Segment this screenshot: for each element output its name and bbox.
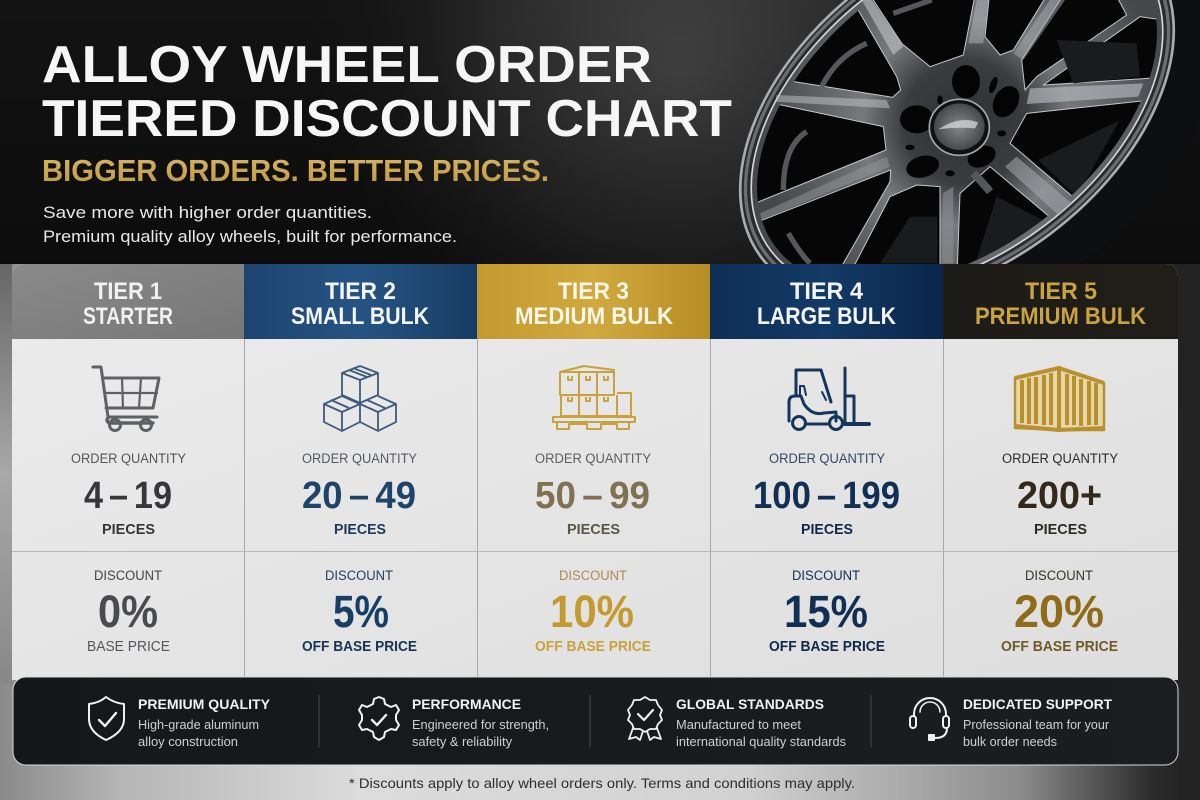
icon: headset	[910, 698, 949, 740]
icon: stacked boxes	[324, 366, 396, 431]
panel: tier 5: ORDER QUANTITY	[1002, 451, 1118, 466]
feature: premium quality	[89, 696, 271, 749]
title	[42, 36, 732, 148]
icon: shopping cart	[93, 367, 159, 430]
feature: performance: PERFORMANCE	[412, 696, 521, 712]
panel: tier 1: DISCOUNT	[94, 568, 162, 583]
tier 2 heading	[292, 282, 429, 324]
panel: tier 3: DISCOUNT	[559, 568, 627, 583]
panel: tier 2: OFF BASE PRICE	[302, 639, 417, 655]
panel: tier 3: PIECES	[567, 521, 620, 538]
tier 5 heading	[976, 282, 1146, 324]
panel: tier 2	[244, 264, 477, 655]
intro text	[43, 203, 457, 246]
tier 3 heading: MEDIUM BULK	[515, 303, 674, 330]
feature: premium quality: High-grade aluminum	[138, 718, 259, 732]
wheel rim	[738, 0, 1176, 264]
lug holes	[900, 65, 1025, 181]
title: ALLOY WHEEL ORDER	[42, 36, 652, 94]
feature: premium quality: PREMIUM QUALITY	[138, 696, 271, 712]
panel: feature band	[13, 677, 1178, 765]
panel: tier 4: OFF BASE PRICE	[769, 639, 885, 655]
barrel ribs seen through windows	[783, 0, 990, 263]
panel: tier 4: DISCOUNT	[792, 568, 860, 583]
footnote: * Discounts apply to alloy wheel orders only. Terms and conditions may apply.	[349, 775, 855, 791]
feature: performance: Engineered for strength,	[412, 718, 549, 732]
panel: tier 2: PIECES	[334, 521, 386, 538]
feature: performance	[359, 696, 549, 749]
panel: tier 4: PIECES	[801, 521, 853, 538]
feature: global standards: international quality standards	[676, 735, 846, 749]
wheel windows between spokes	[757, 0, 1157, 264]
panel: tier 1: 4 – 19	[84, 475, 172, 517]
tier 4 heading	[758, 282, 896, 324]
title: TIERED DISCOUNT CHART	[42, 90, 732, 148]
panel: tier 2: DISCOUNT	[325, 568, 393, 583]
panel: tier 5	[943, 264, 1178, 655]
feature: global standards: GLOBAL STANDARDS	[676, 696, 824, 712]
tier 5 heading: TIER 5	[1025, 278, 1097, 305]
feature: dedicated support	[910, 696, 1112, 749]
icon: shield with check	[89, 697, 124, 740]
icon: shipping container	[1015, 366, 1104, 430]
tier 1 heading: TIER 1	[94, 278, 162, 305]
tier 4 heading: LARGE BULK	[757, 303, 897, 330]
panel: tier 3	[477, 264, 710, 655]
panel: tier 4: ORDER QUANTITY	[769, 451, 885, 466]
wheel photo illustration	[738, 0, 1176, 264]
feature: global standards: Manufactured to meet	[676, 718, 802, 732]
spoke highlights	[760, 0, 1143, 263]
intro text: Save more with higher order quantities.	[43, 203, 372, 222]
tier 2 heading: SMALL BULK	[291, 303, 430, 330]
tier table	[12, 264, 1178, 680]
panel: tier 5: PIECES	[1034, 521, 1087, 538]
tier 5 heading: PREMIUM BULK	[975, 303, 1147, 330]
panel: tier 3: ORDER QUANTITY	[535, 451, 651, 466]
panel: tier 3: 10%	[550, 586, 634, 637]
panel: tier 2: 20 – 49	[302, 475, 416, 517]
panel: tier 4: 15%	[784, 586, 868, 637]
feature: dedicated support: Professional team for your	[963, 718, 1109, 732]
icon: gear with check	[359, 697, 399, 740]
panel: tier 1	[12, 264, 244, 655]
tier 1 heading: STARTER	[83, 303, 173, 330]
panel: tier 5: DISCOUNT	[1025, 568, 1093, 583]
center cap	[929, 99, 989, 155]
panel: tier 2: 5%	[333, 586, 389, 637]
panel: tier 3: 50 – 99	[535, 475, 650, 517]
tier 2 heading: TIER 2	[325, 278, 396, 305]
panel: tier 1: ORDER QUANTITY	[71, 451, 186, 466]
feature: dedicated support: bulk order needs	[963, 735, 1057, 749]
feature: global standards	[628, 696, 846, 749]
icon: forklift	[789, 368, 869, 430]
intro text: Premium quality alloy wheels, built for performance.	[43, 227, 457, 246]
panel: tier 4: 100 – 199	[753, 475, 900, 517]
window depth tones	[880, 40, 1140, 270]
wheel barrel	[702, 0, 1200, 407]
panel: tier 4	[710, 264, 943, 655]
tagline: BIGGER ORDERS. BETTER PRICES.	[42, 153, 549, 188]
panel: tier 1: 0%	[98, 586, 158, 637]
panel: tier 5: 200+	[1017, 475, 1102, 517]
panel: tier 2: ORDER QUANTITY	[302, 451, 417, 466]
icon: pallet of boxes	[553, 366, 635, 429]
panel: tier 1: PIECES	[102, 521, 155, 538]
panel: tier 5: 20%	[1014, 586, 1104, 637]
feature: dedicated support: DEDICATED SUPPORT	[963, 696, 1112, 712]
icon: award ribbon	[628, 697, 662, 740]
feature: premium quality: alloy construction	[138, 735, 238, 749]
tier 3 heading	[516, 282, 673, 324]
tier 3 heading: TIER 3	[558, 278, 629, 305]
panel: tier 1: BASE PRICE	[87, 639, 170, 655]
tier 1 heading	[84, 282, 172, 324]
panel: tier 5: OFF BASE PRICE	[1001, 639, 1118, 655]
feature: performance: safety & reliability	[412, 735, 513, 749]
panel: tier 3: OFF BASE PRICE	[535, 639, 651, 655]
tier 4 heading: TIER 4	[790, 278, 864, 305]
